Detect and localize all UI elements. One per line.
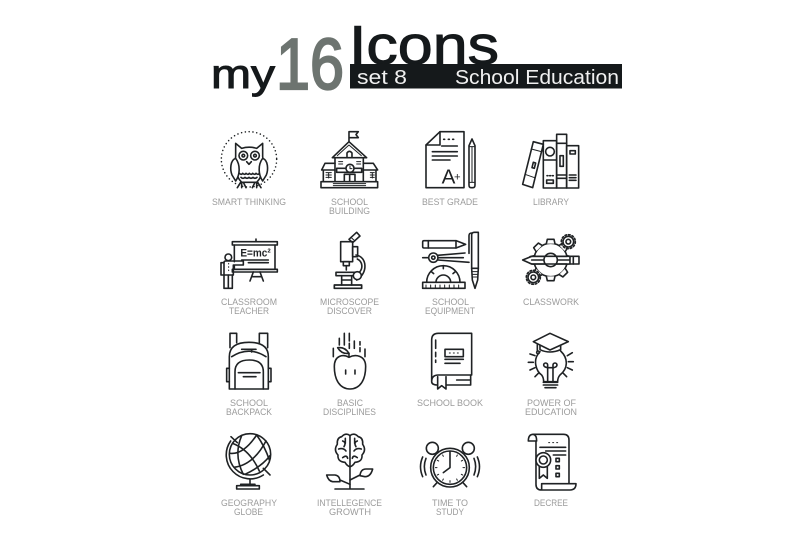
label: power of education: POWER OF: [527, 398, 577, 408]
icon: owl: [221, 132, 277, 188]
label: power of education: EDUCATION: [525, 407, 577, 417]
label: basic disciplines: DISCIPLINES: [323, 407, 376, 417]
label: time to study: STUDY: [436, 507, 464, 517]
title: Icons: [349, 14, 499, 76]
label: intelligence growth: GROWTH: [329, 507, 371, 517]
icon: classwork gears and pencil: [523, 235, 579, 284]
icon: apple: [333, 333, 366, 389]
label: classroom teacher: CLASSROOM: [221, 297, 277, 307]
label: school backpack: [226, 398, 272, 417]
title: 16: [276, 25, 344, 105]
label: school equipment: [425, 297, 475, 316]
icon: library: [523, 134, 579, 188]
label: smart thinking: SMART THINKING: [212, 197, 286, 207]
title: [211, 14, 622, 105]
label: intelligence growth: INTELLEGENCE: [317, 498, 382, 508]
icon: classroom teacher: E=mc²: [240, 248, 271, 260]
label: time to study: TIME TO: [432, 498, 468, 508]
label: best grade: BEST GRADE: [422, 197, 478, 207]
label: library: LIBRARY: [533, 197, 569, 207]
label: school book: SCHOOL BOOK: [417, 398, 483, 408]
icon: alarm clock: [420, 442, 479, 487]
icon: intelligence growth: [327, 434, 373, 489]
label: time to study: [432, 498, 468, 517]
label: geography globe: [221, 498, 277, 517]
label: school backpack: SCHOOL: [230, 398, 268, 408]
label: microscope discover: [320, 297, 379, 316]
label: school backpack: BACKPACK: [226, 407, 272, 417]
icon: school backpack: [227, 333, 271, 389]
label: classroom teacher: TEACHER: [229, 306, 269, 316]
icon: classroom teacher: [221, 239, 277, 288]
label: school building: [329, 197, 370, 216]
label: school building: SCHOOL: [331, 197, 368, 207]
title: set 8: [357, 67, 407, 89]
icon: school book: [432, 333, 472, 389]
label: basic disciplines: [323, 398, 376, 417]
icon: best grade: [426, 132, 475, 189]
icon: geography globe: [226, 434, 271, 489]
label: school equipment: EQUIPMENT: [425, 306, 475, 316]
label: microscope discover: DISCOVER: [327, 306, 372, 316]
label: basic disciplines: BASIC: [337, 398, 363, 408]
label: school equipment: SCHOOL: [432, 297, 469, 307]
title: School Education: [455, 67, 619, 89]
icon: decree scroll: [528, 434, 576, 490]
label: microscope discover: MICROSCOPE: [320, 297, 379, 307]
title: my: [211, 51, 276, 97]
label: intelligence growth: [317, 498, 382, 517]
label: school building: BUILDING: [329, 206, 370, 216]
icon: best grade: A: [442, 166, 456, 189]
icon: school equipment: [423, 232, 478, 288]
label: decree: DECREE: [534, 498, 568, 508]
label: geography globe: GLOBE: [234, 507, 263, 517]
label: classwork: CLASSWORK: [523, 297, 579, 307]
icon: microscope: [334, 232, 365, 288]
icon: power of education bulb: [528, 333, 573, 388]
label: geography globe: GEOGRAPHY: [221, 498, 277, 508]
icon: school building: [321, 132, 378, 188]
icon: best grade: +: [454, 172, 461, 184]
label: power of education: [525, 398, 577, 417]
label: classroom teacher: [221, 297, 277, 316]
